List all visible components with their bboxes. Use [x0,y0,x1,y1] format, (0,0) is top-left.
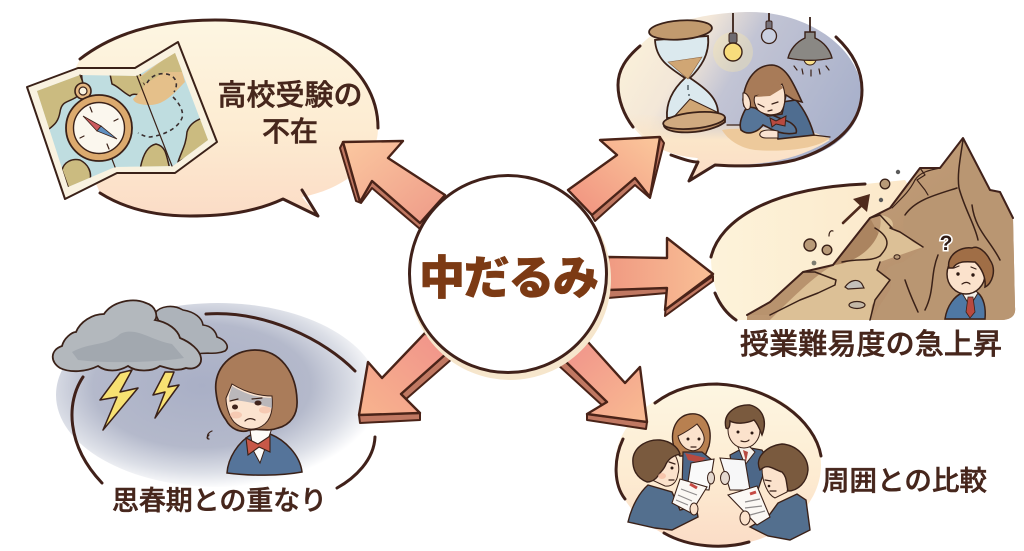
icon: question mark: ? [940,232,952,255]
table shading [622,112,830,182]
text: 授業難易度の急上昇: 授業難易度の急上昇 [740,328,1002,361]
bubble fill [56,303,380,487]
arrow: to upper right [568,137,664,221]
icon: folded map [27,42,217,199]
figure: boy right [728,444,810,540]
arrow: to upper left [340,141,445,229]
icon: storm clouds [53,300,227,371]
figure: boy top [720,405,768,490]
text: 周囲との比較: 周囲との比較 [822,465,987,496]
bubble fill [615,384,821,546]
bubble fill [60,20,378,216]
bubble fill [711,180,1000,320]
bubble fill [618,12,862,182]
figure: boy left [628,440,707,530]
text: 思春期との重なり: 思春期との重なり [112,486,327,516]
panel: 周囲との比較 [615,384,987,546]
figure: gloomy girl [207,350,302,475]
lamp: bulb off [762,13,776,44]
panel: 時間と疲れ [618,12,862,182]
bubble outline [72,314,375,488]
lamp: pendant [788,17,832,76]
panel: 授業難易度の急上昇 [711,138,1015,361]
bubble outline [618,37,862,181]
arrow: to right [608,238,713,316]
figure: tired student at desk [727,65,830,139]
test paper right [728,486,770,525]
arrow: to lower right [557,342,647,429]
figure: girl [672,414,714,490]
panel: 高校受験の不在: 不在 [262,116,318,147]
bubble outline [711,184,865,320]
falling rocks [804,170,900,265]
icon: compass [66,83,132,161]
figure: confused boy [940,232,993,319]
icon: hourglass [648,18,726,132]
bubble outline [616,384,821,546]
panel: 思春期との重なり [53,300,380,516]
panel: 高校受験の不在 [27,20,378,216]
arrow: to lower left [359,333,453,423]
arrow: upward difficulty [843,194,870,223]
lamp: bulb left [713,13,753,72]
icon: lightning bolts [100,370,179,430]
bubble outline [80,20,378,216]
central circle: 中だるみ [409,176,611,380]
boulders on slope [845,255,900,308]
mountain [747,138,1015,320]
test paper left [672,479,707,513]
text: 高校受験の不在: 高校受験の [217,79,363,112]
title: 中だるみ: 中だるみ [419,252,599,304]
